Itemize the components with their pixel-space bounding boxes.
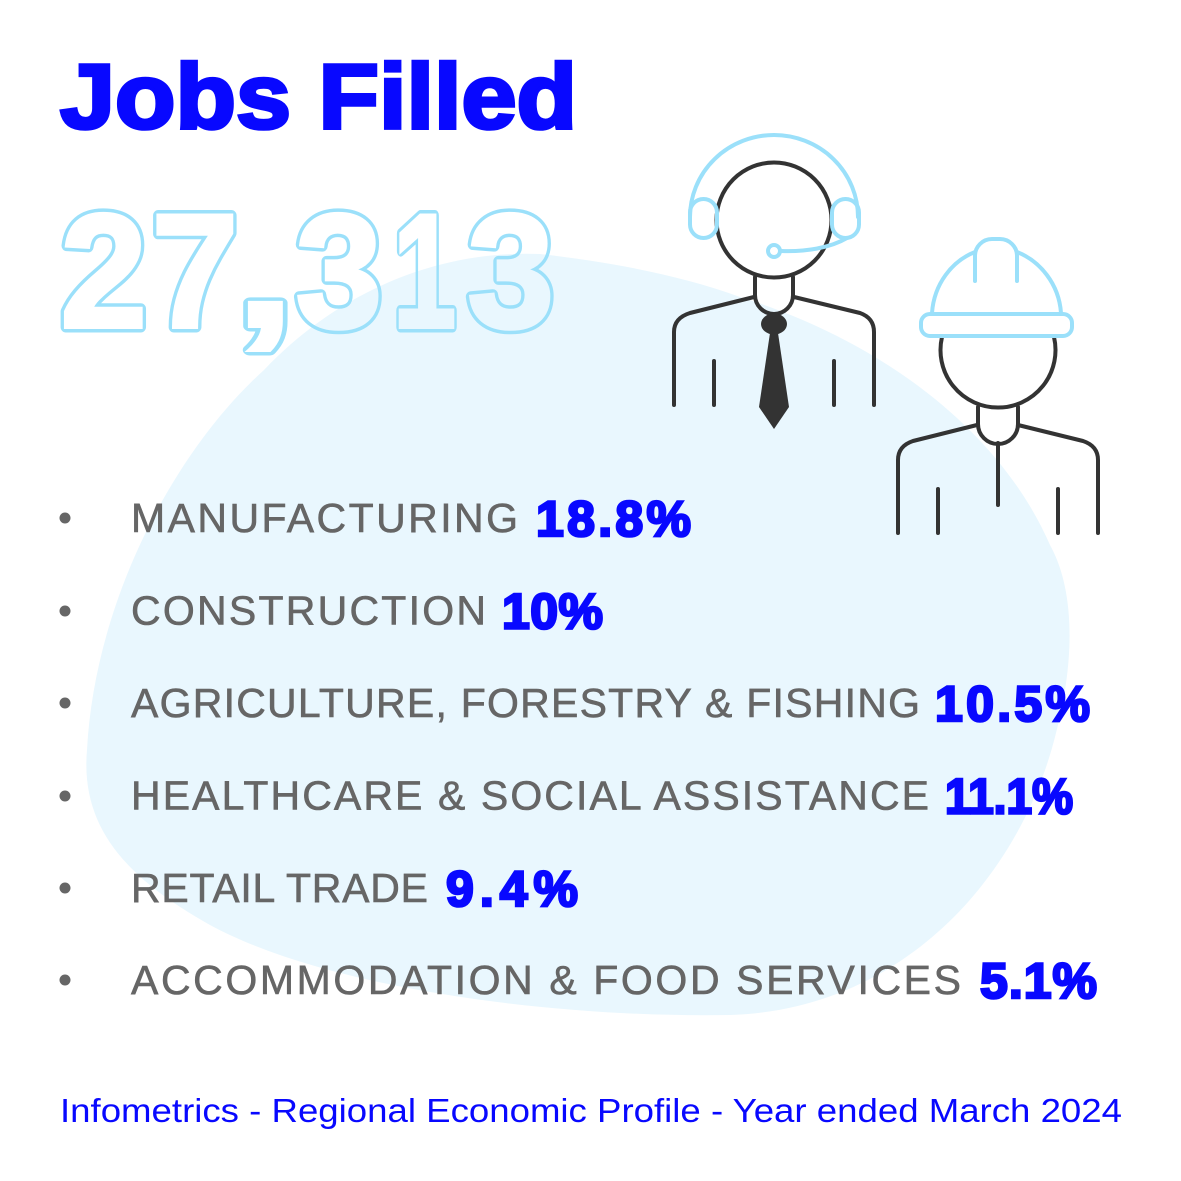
row: healthcare: HEALTHCARE & SOCIAL ASSISTANCE xyxy=(131,772,929,818)
icon: call centre worker xyxy=(674,135,874,429)
total jobs number, outlined: 3 xyxy=(468,180,554,362)
row: retail xyxy=(60,861,578,917)
title: Jobs Filled xyxy=(60,46,577,148)
background blob xyxy=(86,254,1070,1015)
icon: construction worker xyxy=(898,239,1098,533)
total jobs number, outlined: , xyxy=(236,186,294,360)
row: accommodation: 5.1% xyxy=(980,953,1097,1009)
source footer: Infometrics - Regional Economic Profile - Year ended March 2024 xyxy=(60,1092,1122,1129)
row: accommodation xyxy=(60,953,1097,1009)
head and body xyxy=(674,162,874,405)
row: retail: 9.4% xyxy=(446,861,578,917)
row: agriculture xyxy=(60,676,1090,732)
total jobs number, outlined: 27 xyxy=(60,180,238,362)
row: agriculture: 10.5% xyxy=(935,676,1090,732)
head and body xyxy=(898,337,1098,533)
total jobs number, outlined: 1 xyxy=(393,180,456,362)
hard hat xyxy=(921,239,1072,336)
microphone xyxy=(768,238,847,257)
row: healthcare xyxy=(60,768,1073,824)
total jobs number, outlined: 3 xyxy=(296,180,382,362)
tie xyxy=(759,314,789,429)
headset band and cups xyxy=(690,135,859,238)
row: retail: RETAIL TRADE xyxy=(131,865,428,911)
row: manufacturing: MANUFACTURING xyxy=(131,495,518,541)
total jobs number, outlined xyxy=(60,208,554,356)
row: agriculture: AGRICULTURE, FORESTRY & FISHING xyxy=(131,680,920,726)
row: accommodation: ACCOMMODATION & FOOD SERVICES xyxy=(131,957,961,1003)
row: healthcare: 11.1% xyxy=(945,768,1073,824)
row: construction xyxy=(60,584,603,640)
row: construction: 10% xyxy=(502,584,603,640)
sector list xyxy=(60,491,1097,1009)
row: construction: CONSTRUCTION xyxy=(131,588,486,634)
row: manufacturing xyxy=(60,491,691,547)
row: manufacturing: 18.8% xyxy=(536,491,691,547)
